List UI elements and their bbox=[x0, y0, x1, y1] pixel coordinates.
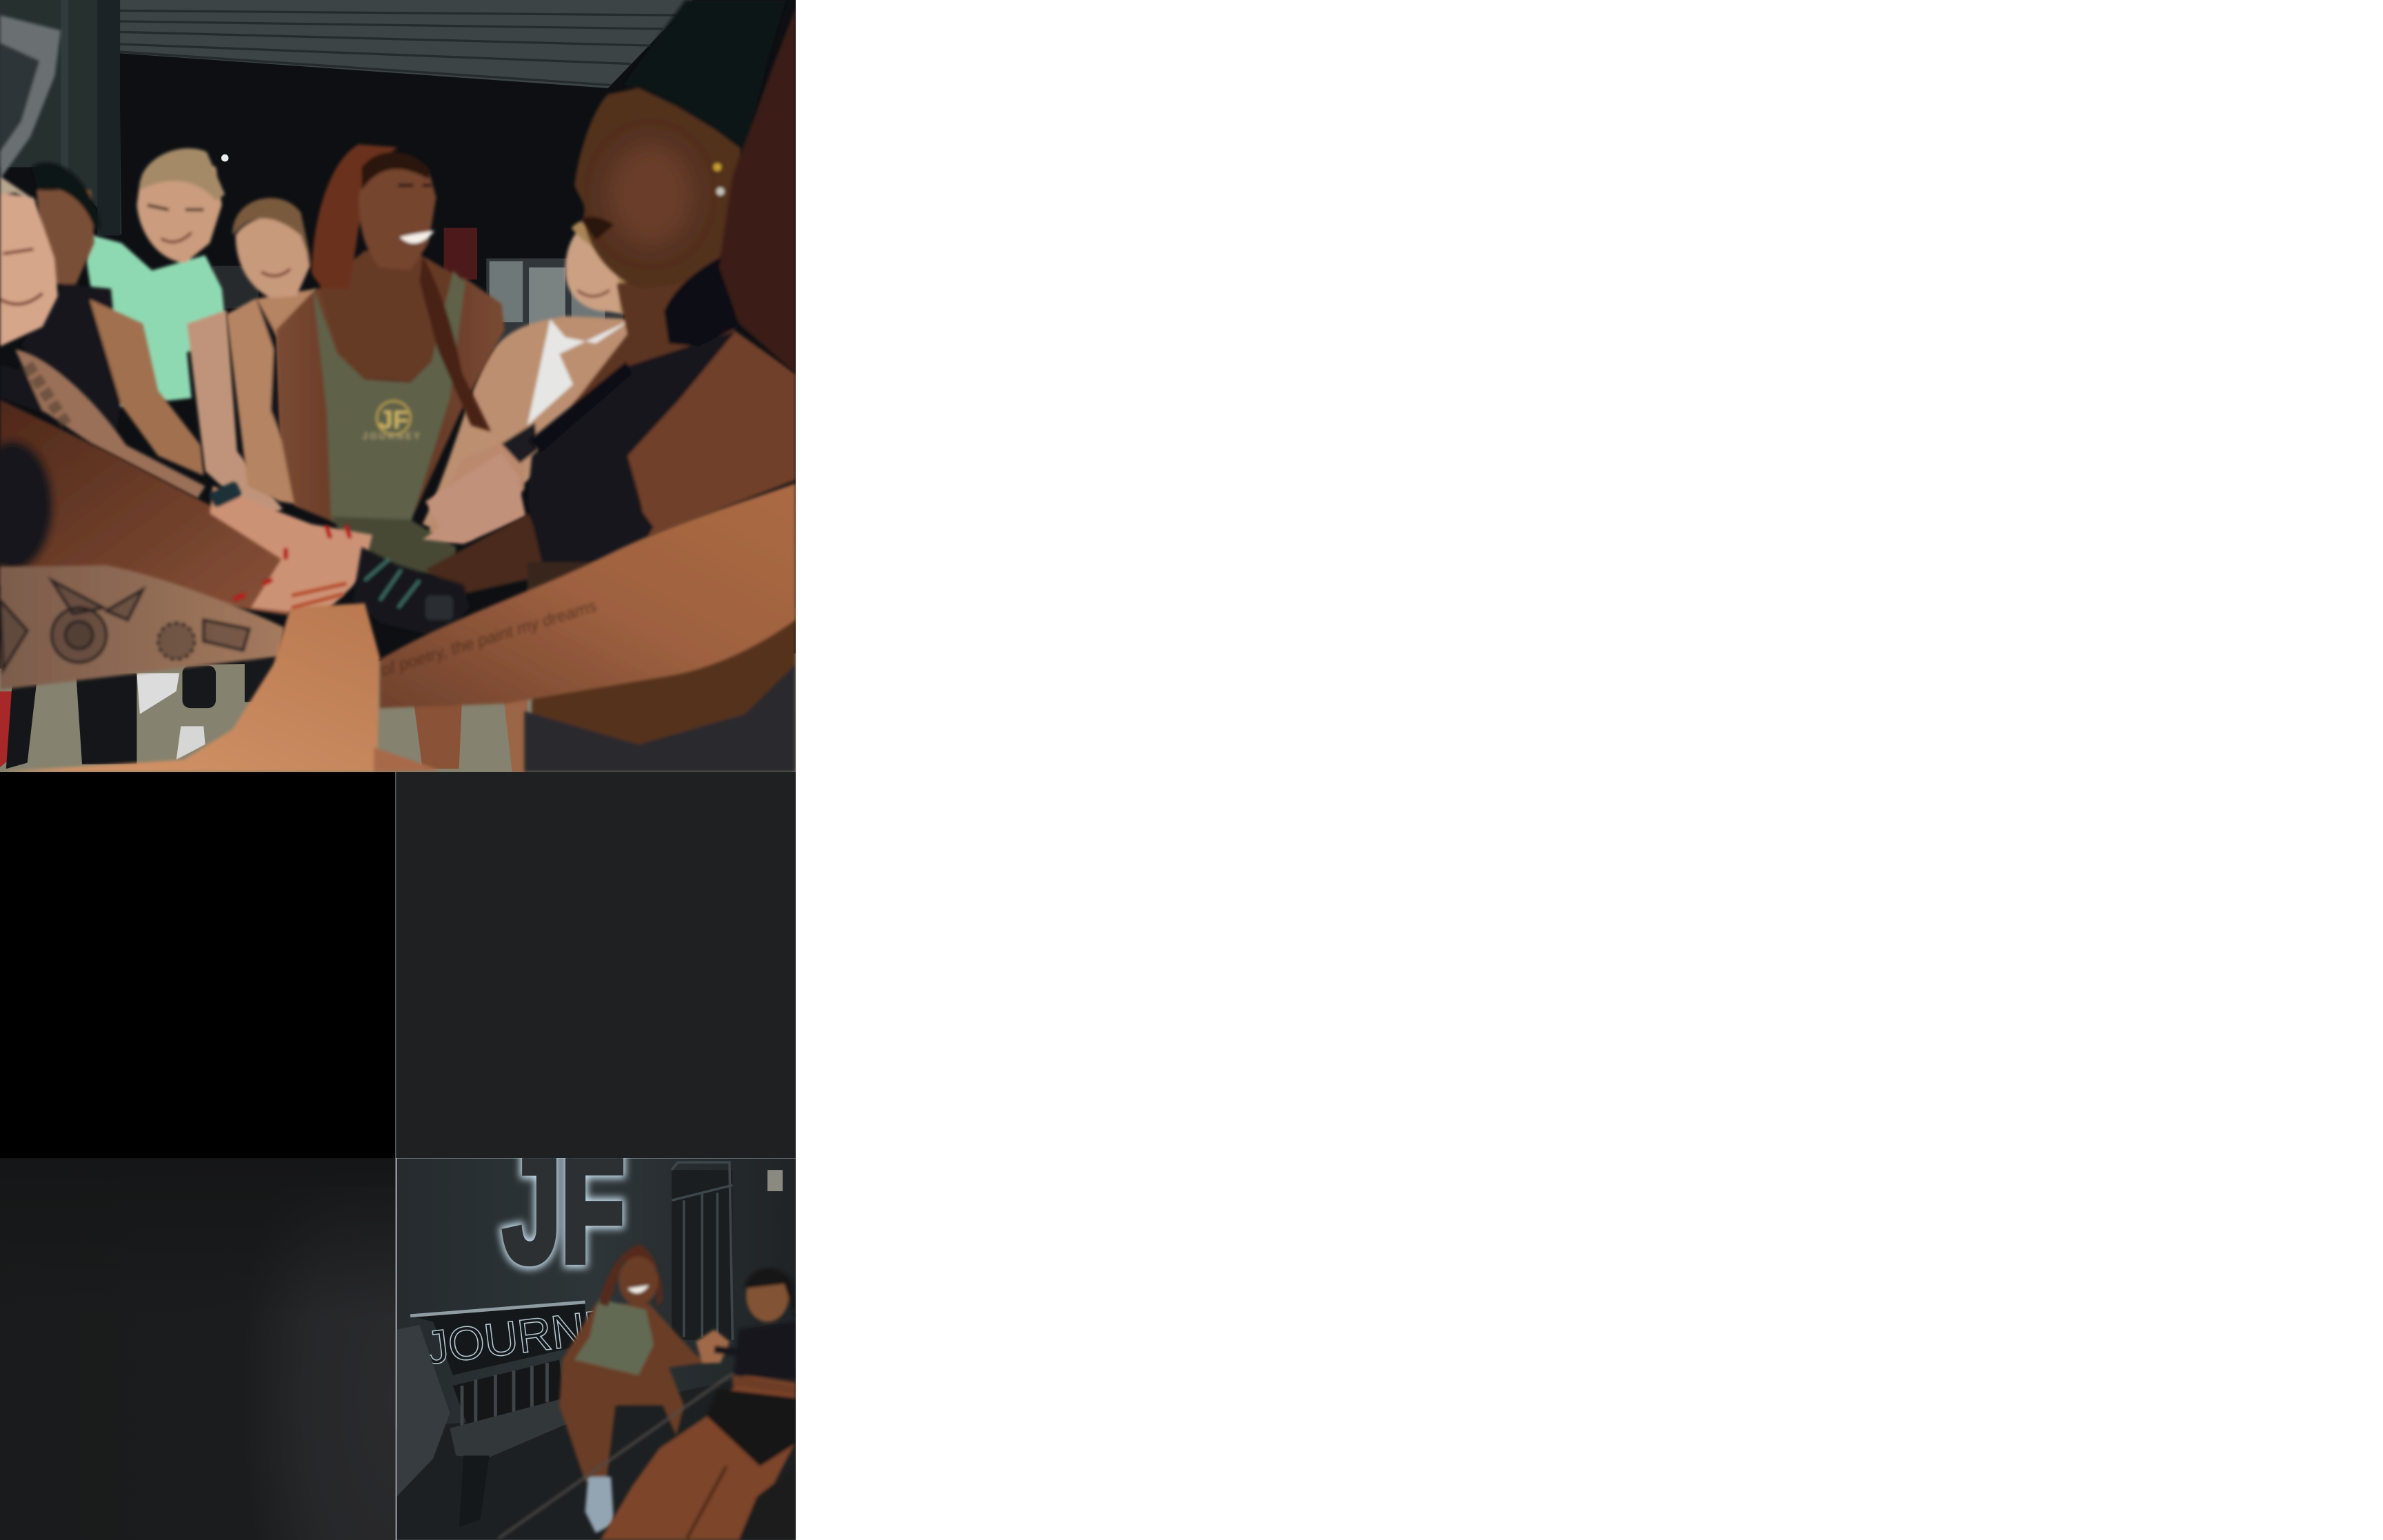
person: woman rowing in black top bbox=[499, 1268, 796, 1540]
arm: dark skinned arm from left bbox=[0, 400, 290, 616]
person: central smiling woman in olive tank bbox=[276, 144, 505, 574]
logo on tank bbox=[363, 401, 422, 441]
JOURNEY wall sign: JOURNEY bbox=[422, 1295, 650, 1375]
person: woman at far left bbox=[0, 176, 205, 498]
logo on tank: JOURNEY bbox=[363, 431, 422, 441]
arm: tattooed forearm from left bbox=[0, 565, 284, 690]
logo on tank: JF bbox=[379, 405, 409, 434]
person: woman in white top bbox=[423, 219, 639, 544]
wall and floor bbox=[396, 1158, 796, 1540]
icon: tattoo rose bbox=[0, 580, 249, 670]
illuminated JF wall sign: JF bbox=[503, 1120, 625, 1294]
weights and bench bbox=[396, 1325, 574, 1527]
person: dark foreground face at right edge bbox=[719, 8, 796, 374]
panel: dark charcoal block bbox=[396, 772, 796, 1158]
grey blurred foreground object at top left bbox=[0, 15, 61, 179]
person: woman in black top and headscarf bbox=[21, 163, 203, 476]
black gloved hand bbox=[352, 547, 470, 638]
panel: dark gradient block bbox=[0, 1158, 395, 1540]
panel: black empty block bbox=[0, 772, 395, 1158]
photo: team huddle with hands stacked bbox=[0, 0, 796, 772]
illuminated JF wall sign bbox=[503, 1120, 625, 1294]
person: woman in black bra, foreground right bbox=[425, 0, 796, 772]
hand reaching from right bbox=[423, 453, 526, 544]
photo: two women in the gym under JF sign bbox=[396, 1120, 796, 1540]
arm: long forearm from right with script tattoo bbox=[379, 483, 796, 708]
arm: long forearm from right with script tattoo: of poetry, the paint my dreams bbox=[379, 597, 599, 680]
person: woman in mint shirt bbox=[82, 148, 283, 520]
person: woman with brunette hair bbox=[226, 198, 327, 509]
person: smiling woman seated in olive tank bbox=[559, 1244, 714, 1533]
legs and shoes bbox=[0, 660, 527, 772]
hands stacked at centre bbox=[208, 480, 372, 616]
arm: forearm from lower centre bbox=[0, 583, 441, 772]
illuminated JF wall sign: JF bbox=[503, 1120, 625, 1294]
garage background bbox=[0, 0, 796, 772]
